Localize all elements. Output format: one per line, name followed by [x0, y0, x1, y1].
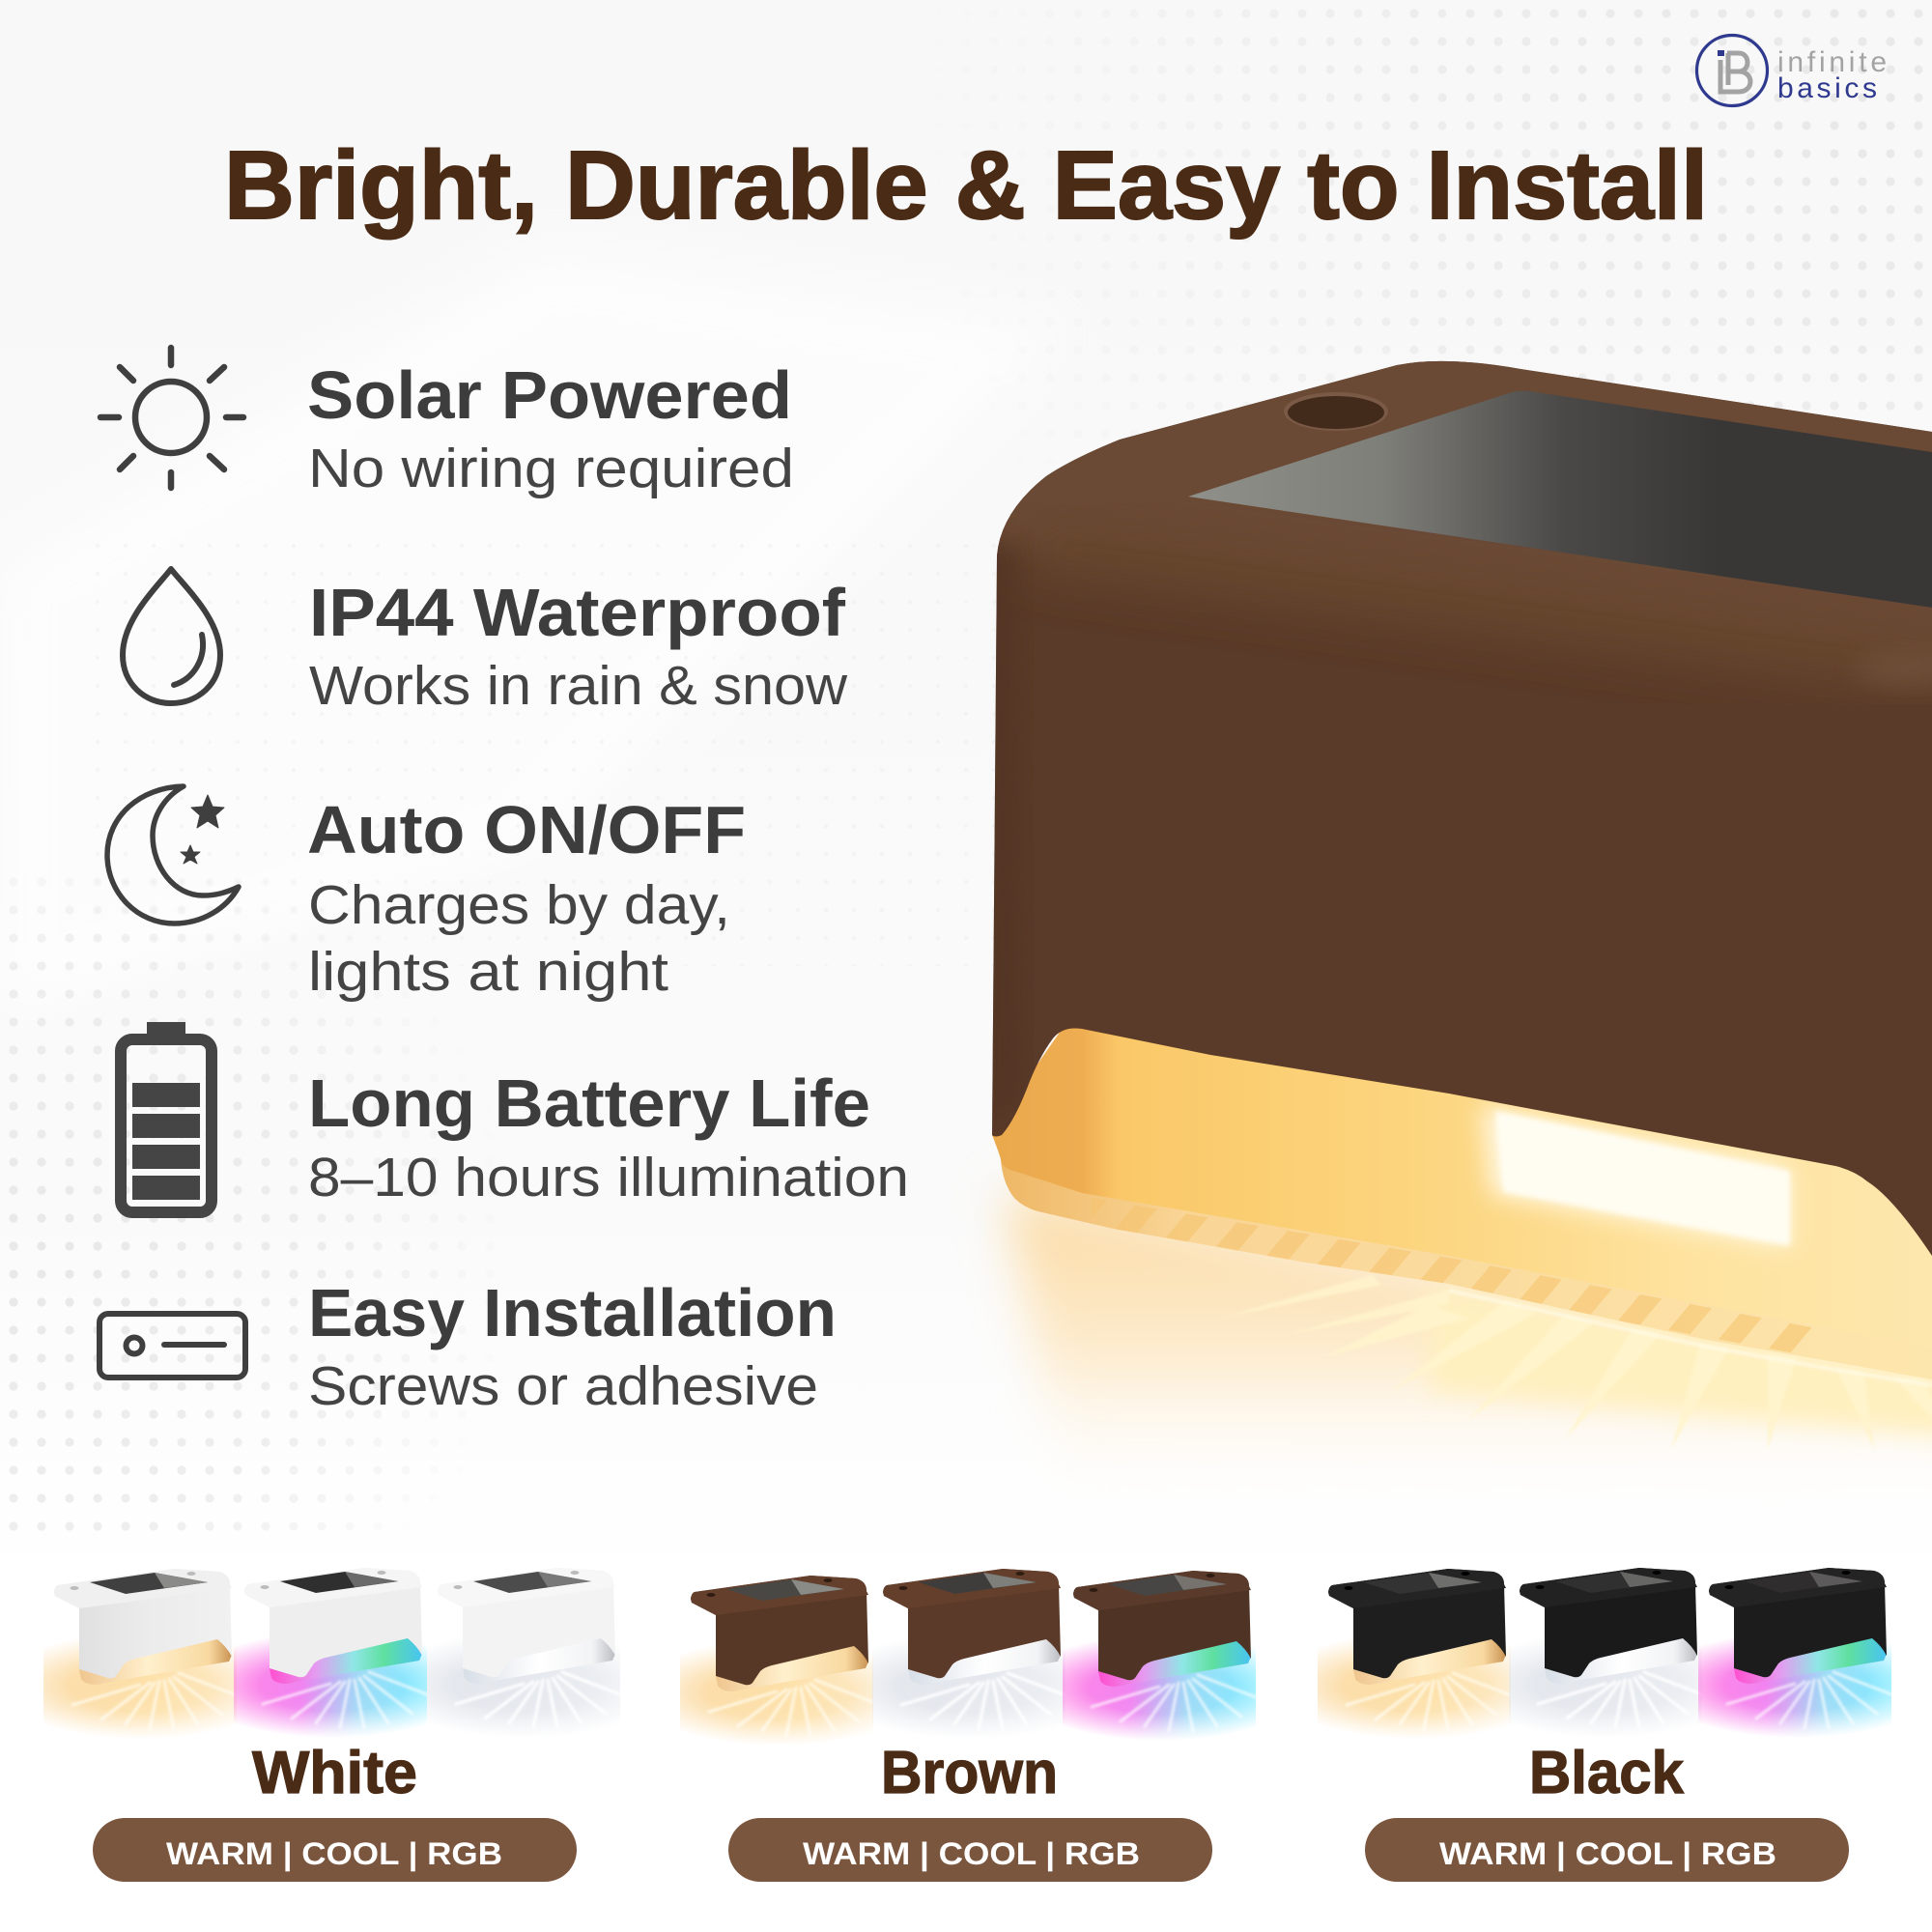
black rgb light: [1698, 1568, 1891, 1738]
light housing: [985, 1014, 1932, 1391]
white rgb light: [234, 1568, 427, 1738]
pill: black modes: WARM | COOL | RGB: [1439, 1836, 1776, 1871]
feature: solar powered: [100, 348, 794, 499]
body: [966, 338, 1932, 1256]
feature list: [99, 348, 909, 1417]
mounting hole: [1284, 392, 1388, 431]
heading: easy installation: Easy Installation: [308, 1275, 837, 1350]
label: black: Black: [1529, 1740, 1684, 1806]
feature: waterproof: [123, 569, 848, 717]
white cool light: [427, 1568, 620, 1738]
feature: auto on off: [107, 786, 746, 1003]
solar panel: [1188, 390, 1932, 608]
heading: solar powered: Solar Powered: [307, 357, 792, 433]
brown cool light: [872, 1569, 1065, 1739]
feature: battery: [121, 1022, 909, 1212]
light glow on surface: [1005, 1193, 1932, 1507]
white warm light: [43, 1569, 237, 1739]
text: screws or adhesive: Screws or adhesive: [308, 1355, 818, 1417]
icon: moon and stars: [107, 786, 239, 923]
pill: brown modes: [728, 1818, 1212, 1882]
text: no wiring required: No wiring required: [308, 438, 794, 499]
icon: sun: [100, 348, 243, 488]
logo: infinite basics: [1696, 35, 1887, 106]
black cool light: [1509, 1568, 1702, 1738]
icon: battery: [121, 1022, 212, 1212]
pill: white modes: [93, 1818, 577, 1882]
heading: long battery life: Long Battery Life: [308, 1065, 870, 1141]
logo: infinite basics: basics: [1777, 72, 1877, 104]
pill: brown modes: WARM | COOL | RGB: [803, 1836, 1140, 1871]
colour options: [43, 1568, 1891, 1882]
label: white: White: [252, 1740, 417, 1806]
heading: IP44 waterproof: IP44 Waterproof: [309, 575, 846, 650]
text: lights at night: lights at night: [308, 941, 668, 1003]
icon: water drop: [123, 569, 220, 703]
heading: auto on off: Auto ON/OFF: [307, 792, 746, 867]
logo: infinite basics: infinite: [1777, 46, 1887, 78]
label: brown: Brown: [881, 1740, 1058, 1806]
text: charges by day: Charges by day,: [308, 874, 730, 936]
black warm light: [1318, 1569, 1511, 1739]
pill: black modes: [1365, 1818, 1849, 1882]
product: main brown solar light: [966, 338, 1932, 1507]
text: hours illumination: 8–10 hours illumination: [308, 1147, 909, 1208]
icon: mounting plate: [99, 1314, 245, 1378]
title: Bright, Durable & Easy to Install: [224, 131, 1708, 240]
brown warm light: [680, 1576, 873, 1746]
brown rgb light: [1063, 1571, 1256, 1741]
pill: white modes: WARM | COOL | RGB: [166, 1836, 502, 1871]
option: white: [43, 1568, 620, 1882]
text: works in rain and snow: Works in rain & snow: [309, 655, 848, 717]
option: brown: [680, 1569, 1256, 1882]
option: black: [1318, 1568, 1891, 1882]
feature: easy installation: [99, 1275, 837, 1417]
